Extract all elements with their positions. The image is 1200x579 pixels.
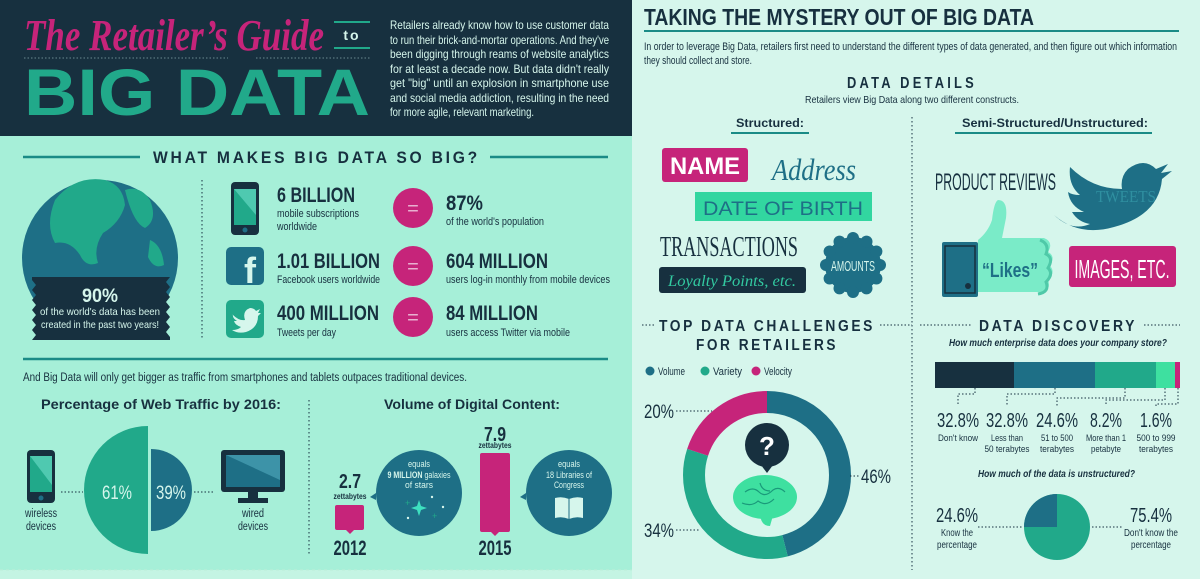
intro paragraph bbox=[390, 18, 609, 119]
row: facebook bbox=[226, 246, 610, 291]
row: facebook: 604 MILLION bbox=[446, 250, 548, 273]
bar labels: 8.2% bbox=[1090, 410, 1122, 432]
bar labels: 500 to 999 bbox=[1136, 433, 1176, 444]
banner: of the world's data has been bbox=[40, 306, 160, 318]
panel: web traffic: wired bbox=[241, 508, 264, 520]
circle: libraries of congress: Congress bbox=[554, 480, 584, 490]
half circle 61%: 61% bbox=[102, 483, 132, 504]
intro paragraph: to run their brick-and-mortar operations. And they've bbox=[390, 33, 609, 47]
globe with 90% banner bbox=[22, 179, 178, 340]
intro paragraph: Retailers already know how to use customer data bbox=[390, 18, 609, 32]
panel: data discovery: Know the bbox=[941, 528, 973, 539]
bar 2015: 7.9 bbox=[484, 424, 506, 446]
panel: web traffic: wireless bbox=[24, 508, 57, 520]
panel: data discovery: percentage bbox=[1131, 540, 1171, 551]
heading: data details bbox=[805, 75, 1019, 106]
panel: data discovery: How much of the data is unstructured? bbox=[978, 468, 1135, 480]
labels: 34% bbox=[644, 521, 674, 542]
tag: product reviews: PRODUCT REVIEWS bbox=[935, 169, 1056, 196]
row: facebook: = bbox=[407, 256, 419, 278]
to box bbox=[334, 22, 370, 48]
icon: thumbs up likes bbox=[942, 200, 1053, 297]
icon: phone bbox=[231, 182, 259, 235]
title: The Retailer's Guide: The Retailer’s Guide bbox=[24, 11, 324, 60]
heading: what makes big data so big: WHAT MAKES BIG DATA SO BIG? bbox=[153, 148, 480, 167]
heading: data details: Retailers view Big Data along two different constructs. bbox=[805, 94, 1019, 106]
circle: libraries of congress bbox=[520, 450, 612, 536]
panel: web traffic: devices bbox=[26, 521, 56, 533]
row: mobile subscriptions: of the world's population bbox=[446, 216, 544, 228]
intro paragraph: for at least a decade now. But data didn't really bbox=[390, 62, 609, 76]
panel: volume of digital content bbox=[334, 396, 612, 560]
circle: galaxies: equals bbox=[408, 459, 430, 469]
bar 2015: zettabytes bbox=[478, 441, 512, 450]
row: mobile subscriptions: = bbox=[407, 198, 419, 220]
legend: Volume bbox=[658, 366, 685, 378]
bar labels: 32.8% bbox=[986, 410, 1028, 432]
tag: Address: Address bbox=[770, 152, 856, 187]
icon: facebook: f bbox=[244, 250, 257, 291]
labels bbox=[644, 402, 891, 542]
right intro paragraph bbox=[644, 41, 1177, 67]
bar 2015 bbox=[478, 424, 512, 560]
bar labels: terabytes bbox=[1040, 444, 1074, 455]
tag: transactions: TRANSACTIONS bbox=[660, 231, 798, 263]
bar 2012: 2.7 bbox=[339, 471, 361, 493]
row: twitter: 400 MILLION bbox=[277, 302, 379, 325]
right intro paragraph: they should collect and store. bbox=[644, 55, 752, 67]
icon: twitter bird tweets: TWEETS bbox=[1096, 187, 1156, 206]
icon: thumbs up likes: “Likes” bbox=[982, 260, 1038, 282]
circle: galaxies bbox=[370, 450, 462, 536]
half circle 39%: 39% bbox=[156, 483, 186, 504]
panel: web traffic: devices bbox=[238, 521, 268, 533]
icon: facebook bbox=[226, 247, 264, 291]
icon: monitor bbox=[221, 450, 285, 503]
legend: Variety bbox=[713, 366, 742, 378]
panel: data discovery: DATA DISCOVERY bbox=[979, 318, 1137, 335]
bar labels: 1.6% bbox=[1140, 410, 1172, 432]
heading: data details: DATA DETAILS bbox=[847, 75, 977, 92]
legend: Velocity bbox=[764, 366, 792, 378]
bar labels: 51 to 500 bbox=[1041, 433, 1073, 444]
stacked bar bbox=[935, 362, 1180, 388]
pie chart bbox=[1024, 494, 1090, 560]
half circle 39% bbox=[151, 449, 192, 531]
tag: images etc bbox=[1069, 246, 1176, 287]
row: twitter: = bbox=[407, 307, 419, 329]
tag: loyalty points: Loyalty Points, etc. bbox=[667, 273, 796, 290]
row: facebook: Facebook users worldwide bbox=[277, 274, 380, 286]
panel: data discovery: 75.4% bbox=[1130, 505, 1172, 527]
icon: twitter bird tweets bbox=[1054, 163, 1172, 230]
panel: structured bbox=[659, 116, 886, 298]
panel: data discovery: Don't know the bbox=[1124, 528, 1178, 539]
title: BIG DATA: BIG DATA bbox=[24, 55, 370, 129]
bar labels: petabyte bbox=[1091, 444, 1121, 455]
tag: loyalty points bbox=[659, 267, 806, 293]
row: twitter bbox=[226, 297, 570, 339]
bar labels: Less than bbox=[991, 433, 1023, 444]
panel: structured: Structured: bbox=[736, 116, 804, 130]
row: mobile subscriptions: worldwide bbox=[276, 221, 317, 233]
bar labels: 24.6% bbox=[1036, 410, 1078, 432]
panel: data discovery: 24.6% bbox=[936, 505, 978, 527]
panel: data discovery bbox=[920, 318, 1180, 560]
circle: galaxies: + bbox=[405, 498, 410, 508]
donut chart bbox=[694, 402, 840, 548]
row: facebook: users log-in monthly from mobile devices bbox=[446, 274, 610, 286]
tag: NAME bbox=[662, 148, 748, 182]
panel: top data challenges bbox=[642, 318, 912, 548]
circle: libraries of congress: 18 Libraries of bbox=[546, 470, 592, 480]
divider strip bbox=[620, 0, 632, 136]
labels: 20% bbox=[644, 402, 674, 423]
row: mobile subscriptions: 87% bbox=[446, 192, 483, 215]
panel: semi-structured: Semi-Structured/Unstructured: bbox=[962, 116, 1148, 130]
bar 2012: zettabytes bbox=[334, 492, 367, 501]
tag: date of birth: DATE OF BIRTH bbox=[703, 199, 863, 220]
icon: brain with question: ? bbox=[759, 431, 775, 461]
icon: wireless phone bbox=[27, 450, 55, 503]
bar 2015: 2015 bbox=[478, 537, 512, 560]
panel: web traffic bbox=[24, 396, 285, 554]
half circle 61% bbox=[84, 426, 148, 554]
circle: galaxies: of stars bbox=[405, 480, 433, 490]
row: twitter: Tweets per day bbox=[277, 327, 336, 339]
icon: twitter bbox=[226, 300, 264, 338]
badge: amounts: AMOUNTS bbox=[831, 258, 875, 275]
row: facebook: 1.01 BILLION bbox=[277, 250, 380, 273]
tag: NAME: NAME bbox=[670, 153, 740, 180]
bar 2012 bbox=[334, 471, 367, 560]
right title: TAKING THE MYSTERY OUT OF BIG DATA bbox=[644, 4, 1034, 30]
banner: 90% bbox=[82, 286, 118, 307]
bar labels: 50 terabytes bbox=[984, 444, 1030, 455]
bar labels: Don't know bbox=[938, 433, 978, 444]
intro text: devices: And Big Data will only get bigger as traffic from smartphones and tablets outpaces traditional devices. bbox=[23, 372, 467, 384]
row: mobile subscriptions bbox=[231, 182, 544, 235]
backgrounds bbox=[0, 0, 632, 579]
panel: top data challenges: FOR RETAILERS bbox=[696, 337, 838, 354]
intro paragraph: and social media addiction, resulting in the need bbox=[390, 91, 609, 105]
banner bbox=[32, 277, 170, 340]
legend bbox=[646, 366, 792, 378]
bar labels: More than 1 bbox=[1086, 433, 1126, 444]
badge: amounts bbox=[820, 232, 886, 298]
panel: web traffic: Percentage of Web Traffic by 2016: bbox=[41, 396, 281, 412]
circle: galaxies: 9 MILLION galaxies bbox=[388, 470, 451, 480]
circle: libraries of congress: equals bbox=[558, 459, 580, 469]
panel: volume of digital content: Volume of Digital Content: bbox=[384, 396, 560, 412]
bar 2012: 2012 bbox=[334, 537, 366, 560]
icon: brain with question bbox=[733, 423, 797, 526]
row: mobile subscriptions: 6 BILLION bbox=[277, 184, 355, 207]
intro paragraph: been digging through reams of website analytics bbox=[390, 47, 609, 61]
to box: to bbox=[343, 27, 361, 43]
labels: 46% bbox=[861, 467, 891, 488]
bar labels bbox=[937, 410, 1176, 455]
intro paragraph: get "big" until an explosion in smartphone use bbox=[390, 76, 609, 90]
header panel bbox=[0, 0, 632, 136]
intro paragraph: for more agile, relevant marketing. bbox=[390, 105, 534, 119]
row: mobile subscriptions: mobile subscriptions bbox=[277, 208, 359, 220]
banner: created in the past two years! bbox=[41, 319, 159, 331]
circle: galaxies: + bbox=[432, 511, 437, 521]
bar labels: 32.8% bbox=[937, 410, 979, 432]
panel: top data challenges: TOP DATA CHALLENGES bbox=[659, 318, 875, 335]
tag: date of birth bbox=[695, 192, 872, 221]
bar labels: terabytes bbox=[1139, 444, 1173, 455]
row: twitter: 84 MILLION bbox=[446, 302, 538, 325]
row: twitter: users access Twitter via mobile bbox=[446, 327, 570, 339]
panel: semi-structured bbox=[935, 116, 1176, 297]
panel: data discovery: percentage bbox=[937, 540, 977, 551]
